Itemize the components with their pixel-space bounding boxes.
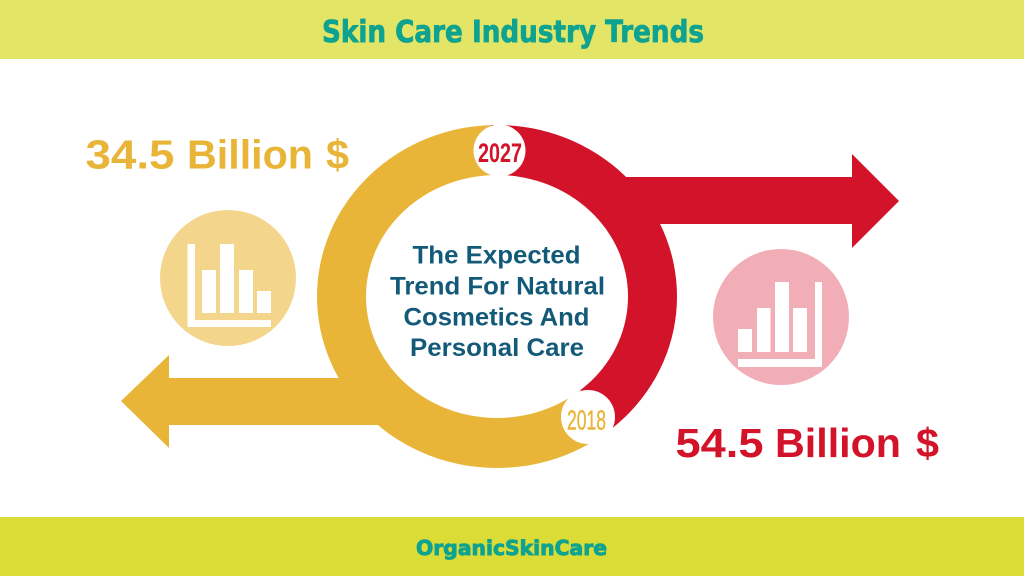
value: 54.5 billion [676,420,939,466]
ring: red half [490,125,677,428]
center text [390,242,605,362]
arrow: red, pointing right [620,154,899,248]
value: 34.5 billion: Billion [187,132,313,178]
icon: gold bar chart [160,210,296,346]
bottom banner [0,517,1024,576]
center text: Personal Care [410,334,584,362]
value: 54.5 billion: 54.5 [676,420,764,466]
year badge 2027: 2027 [478,138,522,168]
value: 54.5 billion: $ [916,420,939,466]
icon: red bar chart [713,249,849,385]
center text: Cosmetics And [404,304,590,332]
value: 34.5 billion: $ [326,132,349,178]
value: 34.5 billion [86,132,349,178]
ring: gold half [317,125,590,468]
top banner [0,0,1024,59]
footer brand text: OrganicSkinCare [416,536,607,560]
value: 54.5 billion: Billion [775,420,901,466]
center text: The Expected [412,242,580,270]
title: Skin Care Industry Trends [322,15,704,50]
year badge 2018: 2018 [567,404,606,436]
year badge 2018 [561,390,615,444]
center text: Trend For Natural [390,272,605,300]
value: 34.5 billion: 34.5 [86,132,174,178]
year badge 2027 [474,124,526,176]
arrow: gold, pointing left [121,355,380,448]
